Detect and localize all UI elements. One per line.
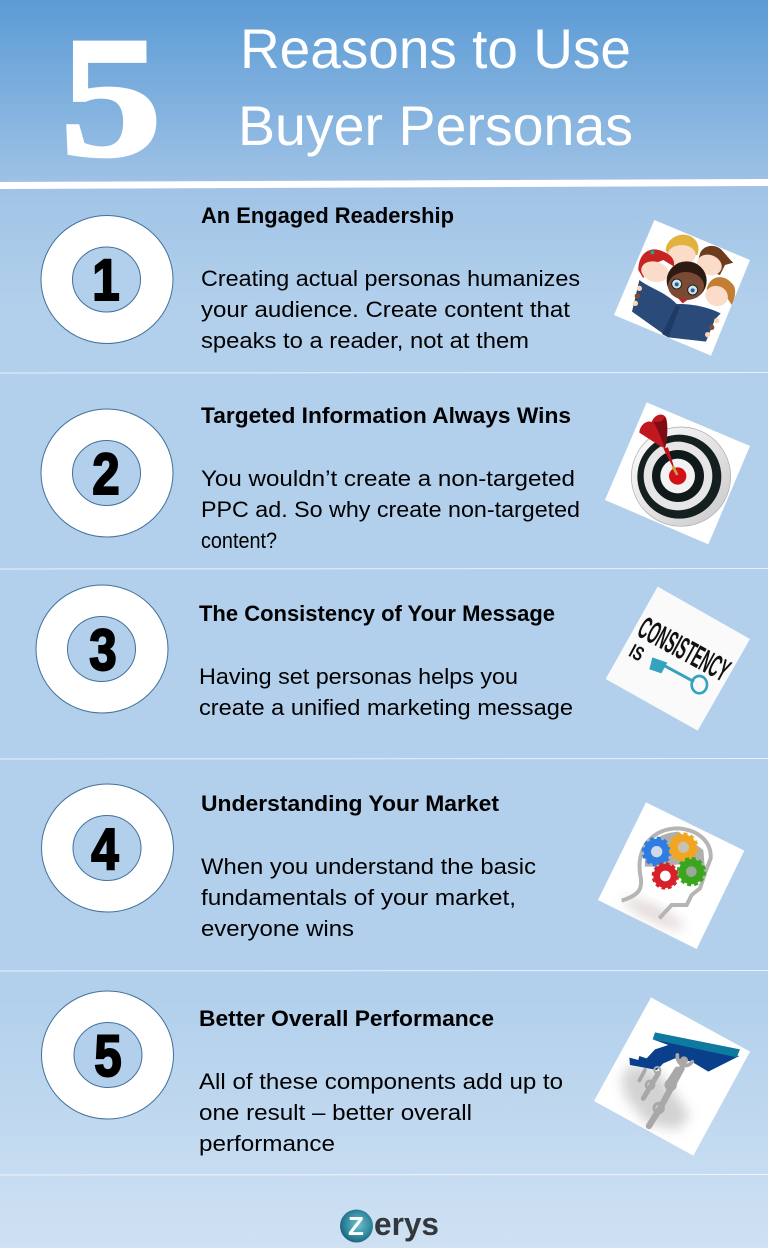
number badge 5 [42,991,174,1119]
body 5: performance [199,1131,335,1156]
icon: dartboard [605,402,750,544]
body 5: one result – better overall [199,1100,472,1125]
reason 2 panel [41,402,750,553]
number badge 2: 2 [92,442,120,507]
icon: consistency key [606,587,750,731]
body 4: fundamentals of your market, [201,885,516,910]
body 1: Creating actual personas humanizes [201,266,580,291]
body 4: everyone wins [201,916,354,941]
title [238,17,633,157]
body 1 [201,266,580,353]
icon: consistency key: IS [625,640,647,666]
title: Reasons to Use [240,17,631,80]
reason 3 panel [36,585,750,731]
number badge 1 [41,216,173,344]
body 1: speaks to a reader, not at them [201,328,529,353]
body 5 [199,1069,563,1156]
body 3: Having set personas helps you [199,664,518,689]
reason 5 panel [42,991,750,1156]
body 4 [201,854,536,941]
icon: head with gears [598,802,744,949]
body 3 [199,664,573,720]
zerys logo: Z [348,1211,364,1241]
big numeral 5: 5 [60,1,162,192]
icon: children reading a book [614,220,750,356]
body 2: content? [201,528,277,553]
body 5: All of these components add up to [199,1069,563,1094]
body 3: create a unified marketing message [199,695,573,720]
reason 1 panel [41,203,750,356]
body 4: When you understand the basic [201,854,536,879]
zerys logo: erys [374,1206,439,1242]
number badge 5: 5 [94,1024,122,1089]
heading 1: An Engaged Readership [201,203,454,228]
heading 4: Understanding Your Market [201,791,500,816]
number badge 3: 3 [89,618,117,683]
body 2: You wouldn’t create a non-targeted [201,466,575,491]
heading 3: The Consistency of Your Message [199,601,555,626]
icon: figures lifting stairs [594,997,750,1156]
number badge 4 [42,784,174,912]
number badge 2 [41,409,173,537]
number badge 1: 1 [92,248,120,313]
body 2 [201,466,580,553]
heading 2: Targeted Information Always Wins [201,403,571,428]
header divider [0,179,768,189]
title: Buyer Personas [238,94,633,157]
body 1: your audience. Create content that [201,297,570,322]
number badge 3 [36,585,168,713]
zerys logo [340,1206,439,1242]
header banner [60,1,633,192]
heading 5: Better Overall Performance [199,1006,494,1031]
body 2: PPC ad. So why create non-targeted [201,497,580,522]
number badge 4: 4 [91,817,119,882]
reason 4 panel [42,784,744,949]
